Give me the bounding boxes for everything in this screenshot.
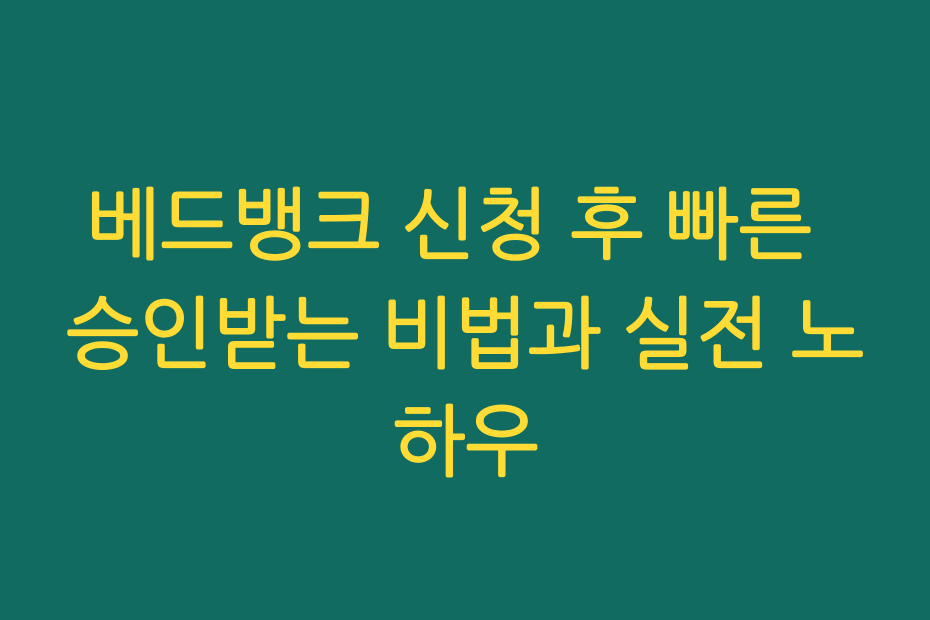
title: 승인받는 비법과 실전 노 (66, 290, 864, 378)
title: 베드뱅크 신청 후 빠른 (87, 181, 812, 269)
title: 하우 (392, 398, 539, 486)
